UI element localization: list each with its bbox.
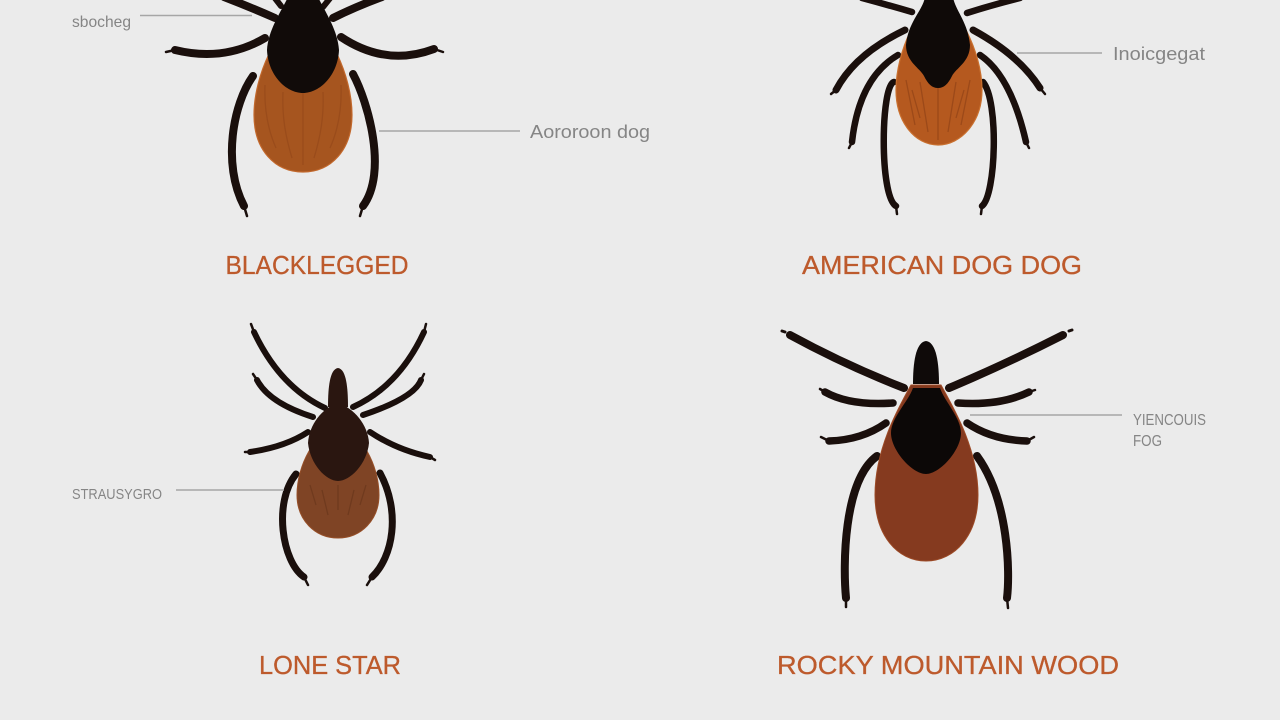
heading: blacklegged: BLACKLEGGED bbox=[226, 250, 408, 280]
heading: lone star: LONE STAR bbox=[259, 650, 401, 680]
label: Rocky Mountain callout: YIENCOUIS bbox=[1133, 412, 1206, 429]
label: Rocky Mountain callout: FOG bbox=[1133, 433, 1162, 450]
tick: lone star bbox=[245, 324, 435, 585]
tick: blacklegged bbox=[166, 0, 443, 216]
label: American dog callout: Aororoon dog bbox=[530, 122, 650, 142]
label: Rocky Mountain callout bbox=[970, 412, 1206, 450]
label: right top callout: Inoicgegat bbox=[1113, 44, 1205, 64]
tick: American dog bbox=[831, 0, 1045, 214]
heading: Rocky Mountain wood: ROCKY MOUNTAIN WOOD bbox=[777, 650, 1119, 680]
heading: American dog: AMERICAN DOG DOG bbox=[802, 250, 1082, 280]
label: lone star callout: STRAUSYGRO bbox=[72, 486, 162, 503]
label: top-left callout: sbocheg bbox=[72, 14, 131, 31]
tick: Rocky Mountain wood bbox=[782, 330, 1072, 608]
